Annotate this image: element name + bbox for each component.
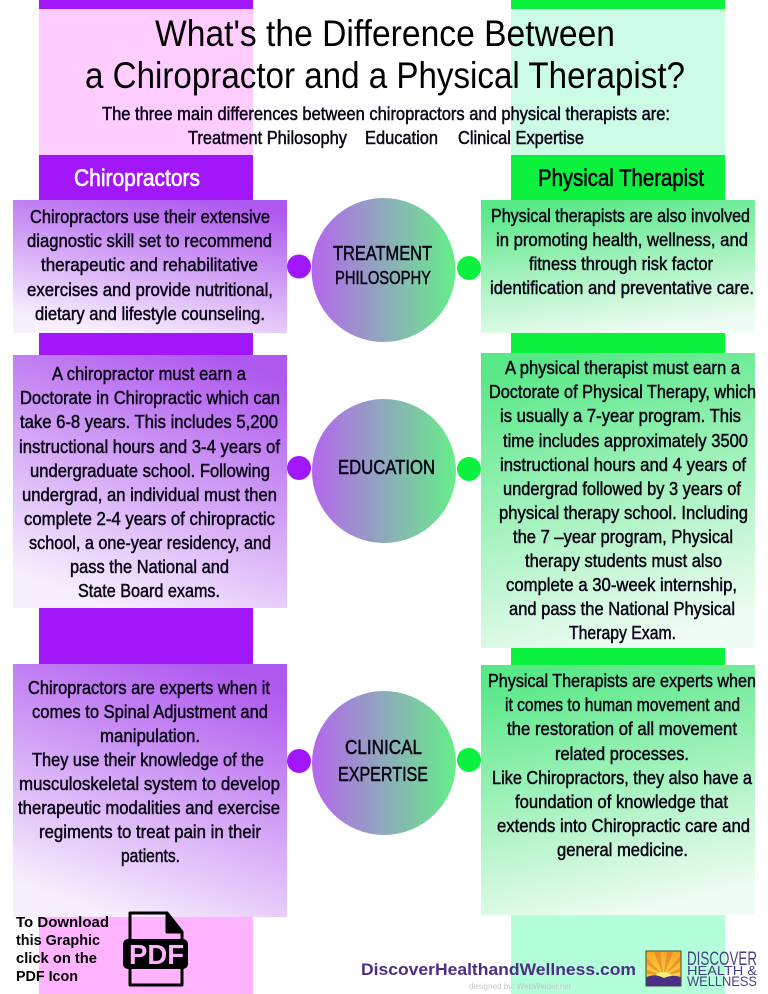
circle: clinical expertise — [312, 691, 456, 835]
circle: education: EDUCATION — [338, 456, 435, 479]
panel: chiropractors clinical expertise: therapeutic modalities and exercise — [18, 797, 280, 818]
panel: chiropractors clinical expertise: regiments to treat pain in their — [39, 821, 261, 842]
website address: DiscoverHealthandWellness.com — [361, 960, 636, 979]
circle: education — [312, 399, 456, 543]
download note: this Graphic — [16, 932, 100, 949]
right column background — [511, 0, 725, 994]
title — [85, 13, 685, 96]
panel: physical therapist education: therapy students must also — [525, 550, 722, 571]
download note: click on the — [16, 950, 97, 967]
heading: Physical Therapist: Physical Therapist — [538, 165, 704, 192]
panel: physical therapist clinical expertise: related processes. — [555, 743, 689, 764]
title: What's the Difference Between — [155, 13, 615, 54]
panel: chiropractors education: A chiropractor must earn a — [52, 363, 247, 384]
panel: chiropractors education — [13, 355, 287, 608]
designer credit: designed by: WebWelder.net — [469, 982, 572, 991]
connector dot: expertise left — [287, 749, 311, 773]
circle: treatment philosophy — [312, 198, 456, 342]
circle: treatment philosophy: TREATMENT — [333, 242, 432, 265]
connector dot: treatment left — [287, 254, 311, 278]
panel: physical therapist education: A physical therapist must earn a — [505, 357, 741, 378]
panel: chiropractors treatment philosophy: therapeutic and rehabilitative — [41, 254, 258, 275]
panel: physical therapist education — [481, 353, 756, 648]
logo: wordmark: HEALTH & — [687, 963, 757, 978]
connector dot: treatment right — [457, 256, 481, 280]
panel: chiropractors treatment philosophy — [13, 200, 287, 333]
panel: chiropractors education: undergrad, an individual must then — [22, 484, 277, 505]
panel: physical therapist clinical expertise: foundation of knowledge that — [515, 791, 728, 812]
download note: To Download — [16, 914, 109, 931]
icon: PDF — [123, 913, 188, 985]
panel: physical therapist treatment philosophy: fitness through risk factor — [529, 253, 713, 274]
panel: chiropractors education: school, a one-year residency, and — [29, 532, 271, 553]
panel: physical therapist education: undergrad followed by 3 years of — [503, 478, 742, 499]
panel: chiropractors treatment philosophy: dietary and lifestyle counseling. — [35, 303, 265, 324]
panel: chiropractors treatment philosophy: diagnostic skill set to recommend — [27, 230, 272, 251]
panel: chiropractors education: undergraduate school. Following — [30, 460, 270, 481]
panel: chiropractors education: Doctorate in Chiropractic which can — [20, 387, 280, 408]
subtitle: The three main differences between chiropractors and physical therapists are: — [102, 103, 670, 124]
heading: Chiropractors: Chiropractors — [74, 165, 200, 192]
connector dot: education left — [287, 456, 311, 480]
subtitle: Clinical Expertise — [458, 127, 584, 148]
logo: wordmark: WELLNESS — [687, 973, 757, 989]
circle: clinical expertise: EXPERTISE — [338, 763, 428, 786]
panel: chiropractors treatment philosophy: Chiropractors use their extensive — [30, 206, 270, 227]
panel: physical therapist clinical expertise: general medicine. — [557, 839, 688, 860]
panel: chiropractors clinical expertise — [13, 664, 287, 917]
panel: physical therapist clinical expertise — [481, 665, 756, 915]
connector dot: expertise right — [457, 748, 481, 772]
panel: chiropractors treatment philosophy: exercises and provide nutritional, — [27, 279, 273, 300]
panel: physical therapist education: the 7 –year program, Physical — [513, 526, 733, 547]
panel: physical therapist education: Therapy Exam. — [569, 622, 676, 643]
panel: physical therapist education: is usually a 7-year program. This — [500, 405, 741, 426]
panel: physical therapist education: complete a 30-week internship, — [506, 574, 737, 595]
panel: chiropractors clinical expertise: Chiropractors are experts when it — [28, 677, 270, 698]
panel: chiropractors clinical expertise: manipulation. — [100, 725, 200, 746]
logo: sunrise — [646, 951, 681, 986]
logo: wordmark — [687, 949, 757, 989]
panel: physical therapist education: physical therapy school. Including — [499, 502, 748, 523]
panel: physical therapist education: instructional hours and 4 years of — [500, 454, 747, 475]
download note: PDF Icon — [16, 968, 78, 985]
circle: clinical expertise: CLINICAL — [345, 736, 422, 759]
circle: treatment philosophy: PHILOSOPHY — [335, 267, 431, 288]
panel: chiropractors clinical expertise: They use their knowledge of the — [32, 749, 264, 770]
panel: chiropractors education: complete 2-4 years of chiropractic — [24, 508, 275, 529]
title: a Chiropractor and a Physical Therapist? — [85, 55, 685, 96]
panel: chiropractors clinical expertise: patients. — [121, 845, 180, 866]
connector dot: education right — [457, 457, 481, 481]
panel: physical therapist education: and pass the National Physical — [509, 598, 735, 619]
left column background — [39, 0, 253, 994]
panel: chiropractors education: pass the National and — [70, 556, 229, 577]
panel: chiropractors clinical expertise: musculoskeletal system to develop — [19, 773, 280, 794]
subtitle: Education — [365, 127, 438, 148]
panel: physical therapist treatment philosophy — [481, 200, 755, 333]
panel: chiropractors clinical expertise: comes to Spinal Adjustment and — [32, 701, 268, 722]
panel: chiropractors education: instructional hours and 3-4 years of — [19, 436, 281, 457]
panel: chiropractors education: take 6-8 years. This includes 5,200 — [20, 411, 278, 432]
icon: PDF: PDF — [129, 939, 184, 970]
download note — [16, 914, 109, 985]
panel: chiropractors education: State Board exams. — [78, 580, 220, 601]
subtitle — [102, 103, 670, 148]
panel: physical therapist clinical expertise: the restoration of all movement — [507, 718, 737, 739]
panel: physical therapist treatment philosophy: in promoting health, wellness, and — [496, 229, 748, 250]
subtitle: Treatment Philosophy — [188, 127, 348, 148]
